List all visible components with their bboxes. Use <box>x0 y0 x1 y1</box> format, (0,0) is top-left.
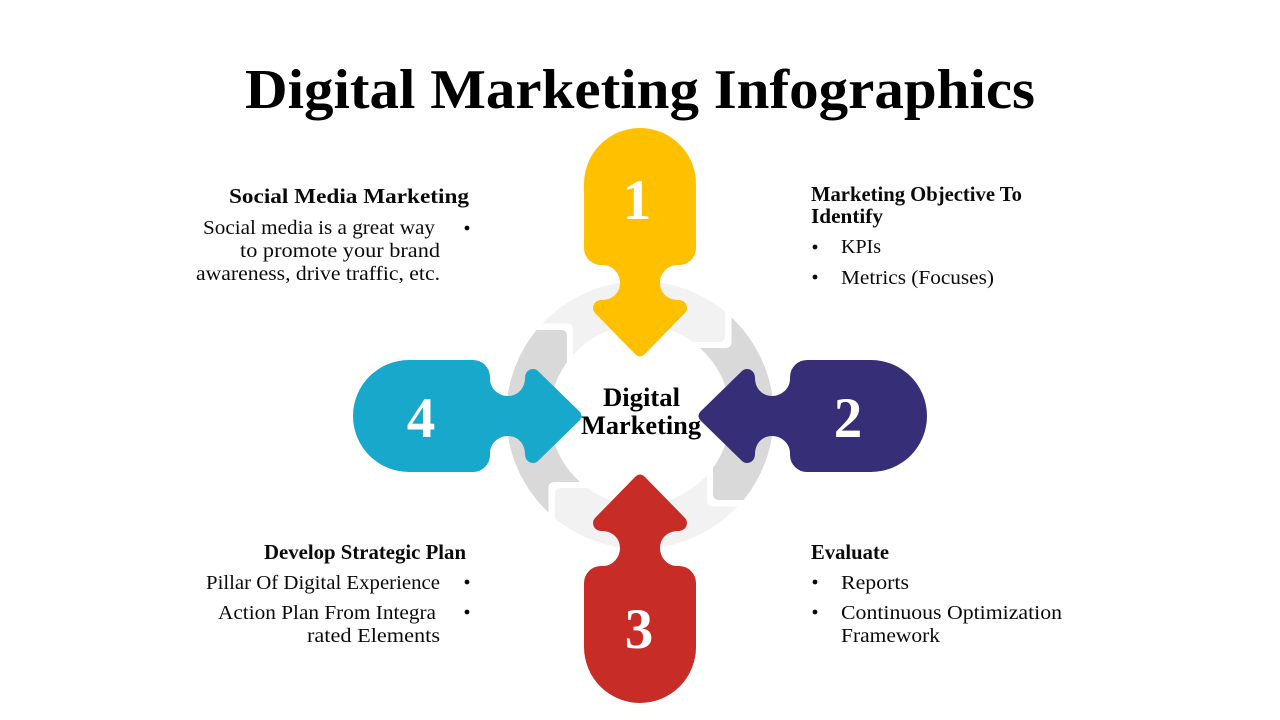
arrow 4: blue: 4 <box>407 387 435 450</box>
text block: marketing objective: KPIs <box>841 236 881 258</box>
arrow 1: yellow: 1 <box>623 169 651 232</box>
arrow 2: navy: 2 <box>834 387 862 450</box>
center label: Digital <box>603 383 680 412</box>
title: Digital Marketing Infographics <box>245 59 1035 121</box>
text block: marketing objective <box>811 182 1022 289</box>
text block: marketing objective: Metrics (Focuses) <box>841 267 994 289</box>
text block: develop strategic plan <box>206 540 469 647</box>
ring segment: right <box>700 318 774 500</box>
text block: evaluate: Evaluate <box>811 540 889 564</box>
text block: marketing objective: Identify <box>811 204 883 228</box>
text block: marketing objective: Marketing Objective To <box>811 182 1022 206</box>
text block: develop strategic plan: rated Elements <box>307 625 440 647</box>
text block: evaluate <box>811 540 1062 647</box>
arrow 3: red: 3 <box>625 598 653 661</box>
text block: evaluate: Framework <box>841 625 941 647</box>
text block: evaluate: Continuous Optimization <box>841 602 1062 624</box>
ring segment: left <box>506 330 580 512</box>
arrow 4: blue <box>353 360 582 472</box>
center label: Marketing <box>581 411 701 440</box>
center label <box>581 383 701 440</box>
arrow 3: red <box>584 474 696 703</box>
text block: evaluate: Reports <box>841 572 909 594</box>
text block: social media marketing <box>196 184 470 285</box>
text block: social media marketing: awareness, drive traffic, etc. <box>196 263 440 285</box>
arrow 1: yellow <box>584 128 696 356</box>
text block: develop strategic plan: Pillar Of Digital Experience <box>206 572 440 594</box>
text block: social media marketing: Social media is a great way <box>203 217 436 239</box>
text block: develop strategic plan: Develop Strategic Plan <box>264 540 466 564</box>
arrow 2: navy <box>698 360 927 472</box>
text block: social media marketing: Social Media Marketing <box>229 184 470 208</box>
ring: four curved segments <box>506 281 774 549</box>
text block: social media marketing: to promote your brand <box>240 240 440 262</box>
ring segment: bottom <box>555 475 738 549</box>
ring segment: top <box>542 281 725 355</box>
text block: develop strategic plan: Action Plan From Integra <box>218 602 436 624</box>
